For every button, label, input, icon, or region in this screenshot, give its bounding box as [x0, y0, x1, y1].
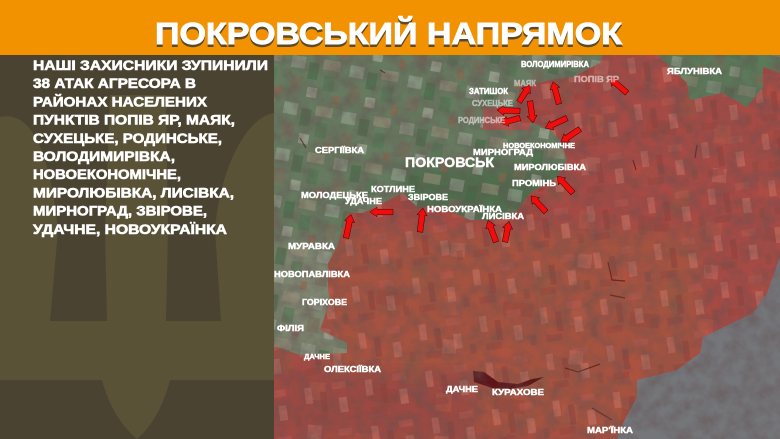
- panel: left text background: [0, 55, 274, 439]
- title shadow: ПОКРОВСЬКИЙ НАПРЯМОК: [155, 18, 622, 54]
- map labels: settlements: СЕРГІЇВКА: [315, 145, 364, 155]
- arrows: attack directions: [341, 74, 630, 244]
- map labels: settlements: ПОПІВ ЯР: [574, 74, 619, 84]
- map labels: settlements: МАЯК: [514, 79, 536, 88]
- text block: summary of repelled attacks: РАЙОНАХ НАСЕЛЕНИХ: [33, 94, 207, 109]
- map labels: settlements: ПОКРОВСЬК: [405, 154, 494, 170]
- text block: summary of repelled attacks: НАШІ ЗАХИСНИКИ ЗУПИНИЛИ: [33, 58, 268, 73]
- text block: summary of repelled attacks: [33, 58, 268, 237]
- map labels: settlements: МИРОЛЮБІВКА: [514, 162, 586, 172]
- map labels: settlements: ГОРІХОВЕ: [302, 297, 347, 307]
- map labels: settlements: ЗВІРОВЕ: [408, 192, 448, 202]
- map: noise texture: [274, 55, 780, 439]
- map labels: settlements: МИРНОГРАД: [473, 147, 533, 157]
- map labels: settlements: ПРОМІНЬ: [512, 178, 556, 188]
- text block: summary of repelled attacks: ПУНКТІВ ПОПІВ ЯР, МАЯК,: [33, 113, 235, 128]
- text block: summary of repelled attacks: 38 АТАК АГРЕСОРА В: [33, 76, 196, 91]
- map labels: settlements: ЗАТИШОК: [469, 87, 508, 96]
- map: green free territory: [274, 55, 780, 355]
- title bar: [0, 0, 780, 55]
- map labels: settlements: КУРАХОВЕ: [492, 387, 544, 397]
- map labels: settlements: НОВОУКРАЇНКА: [427, 204, 502, 214]
- map labels: settlements: [274, 60, 722, 435]
- map labels: settlements: НОВОЕКОНОМІЧНЕ: [503, 143, 575, 150]
- text block: summary of repelled attacks: СУХЕЦЬКЕ, РОДИНСЬКЕ,: [33, 131, 222, 146]
- text block: summary of repelled attacks: ВОЛОДИМИРІВКА,: [33, 149, 175, 164]
- map: ponds and gullies: [300, 70, 697, 420]
- map labels: settlements: ЯБЛУНІВКА: [667, 66, 722, 76]
- map labels: settlements: СУХЕЦЬКЕ: [472, 99, 514, 108]
- map labels: settlements: МУРАВКА: [288, 241, 335, 251]
- map labels: settlements: МОЛОДЕЦЬКЕ: [301, 190, 368, 200]
- text block: summary of repelled attacks: НОВОЕКОНОМІЧНЕ,: [33, 167, 181, 182]
- map labels: settlements: ФІЛІЯ: [277, 323, 304, 333]
- map labels: settlements: УДАЧНЕ: [345, 196, 382, 206]
- map labels: settlements: ЛИСІВКА: [482, 211, 524, 221]
- map labels: settlements: МАР'ЇНКА: [587, 425, 633, 435]
- text block: summary of repelled attacks: УДАЧНЕ, НОВОУКРАЇНКА: [33, 222, 227, 237]
- map labels: settlements: ОЛЕКСІЇВКА: [324, 364, 381, 374]
- map: Kurakhove reservoir: [473, 371, 544, 389]
- map labels: settlements: НОВОПАВЛІВКА: [274, 269, 350, 279]
- map labels: settlements: РОДИНСЬКЕ: [458, 116, 506, 125]
- title: ПОКРОВСЬКИЙ НАПРЯМОК: [155, 15, 622, 51]
- map: satellite base: [274, 55, 780, 439]
- icon: trident emblem: [0, 95, 274, 439]
- map labels: settlements: ДАЧНЕ: [304, 354, 330, 361]
- map: red occupied area: [274, 55, 780, 439]
- map labels: settlements: ДАЧНЕ: [446, 384, 478, 394]
- map labels: settlements: ВОЛОДИМИРІВКА: [521, 60, 589, 69]
- map: grey urban area of Donetsk: [617, 257, 780, 439]
- text block: summary of repelled attacks: МИРОЛЮБІВКА, ЛИСІВКА,: [33, 185, 234, 200]
- map labels: settlements: КОТЛИНЕ: [371, 184, 415, 194]
- text block: summary of repelled attacks: МИРНОГРАД, ЗВІРОВЕ,: [33, 204, 207, 219]
